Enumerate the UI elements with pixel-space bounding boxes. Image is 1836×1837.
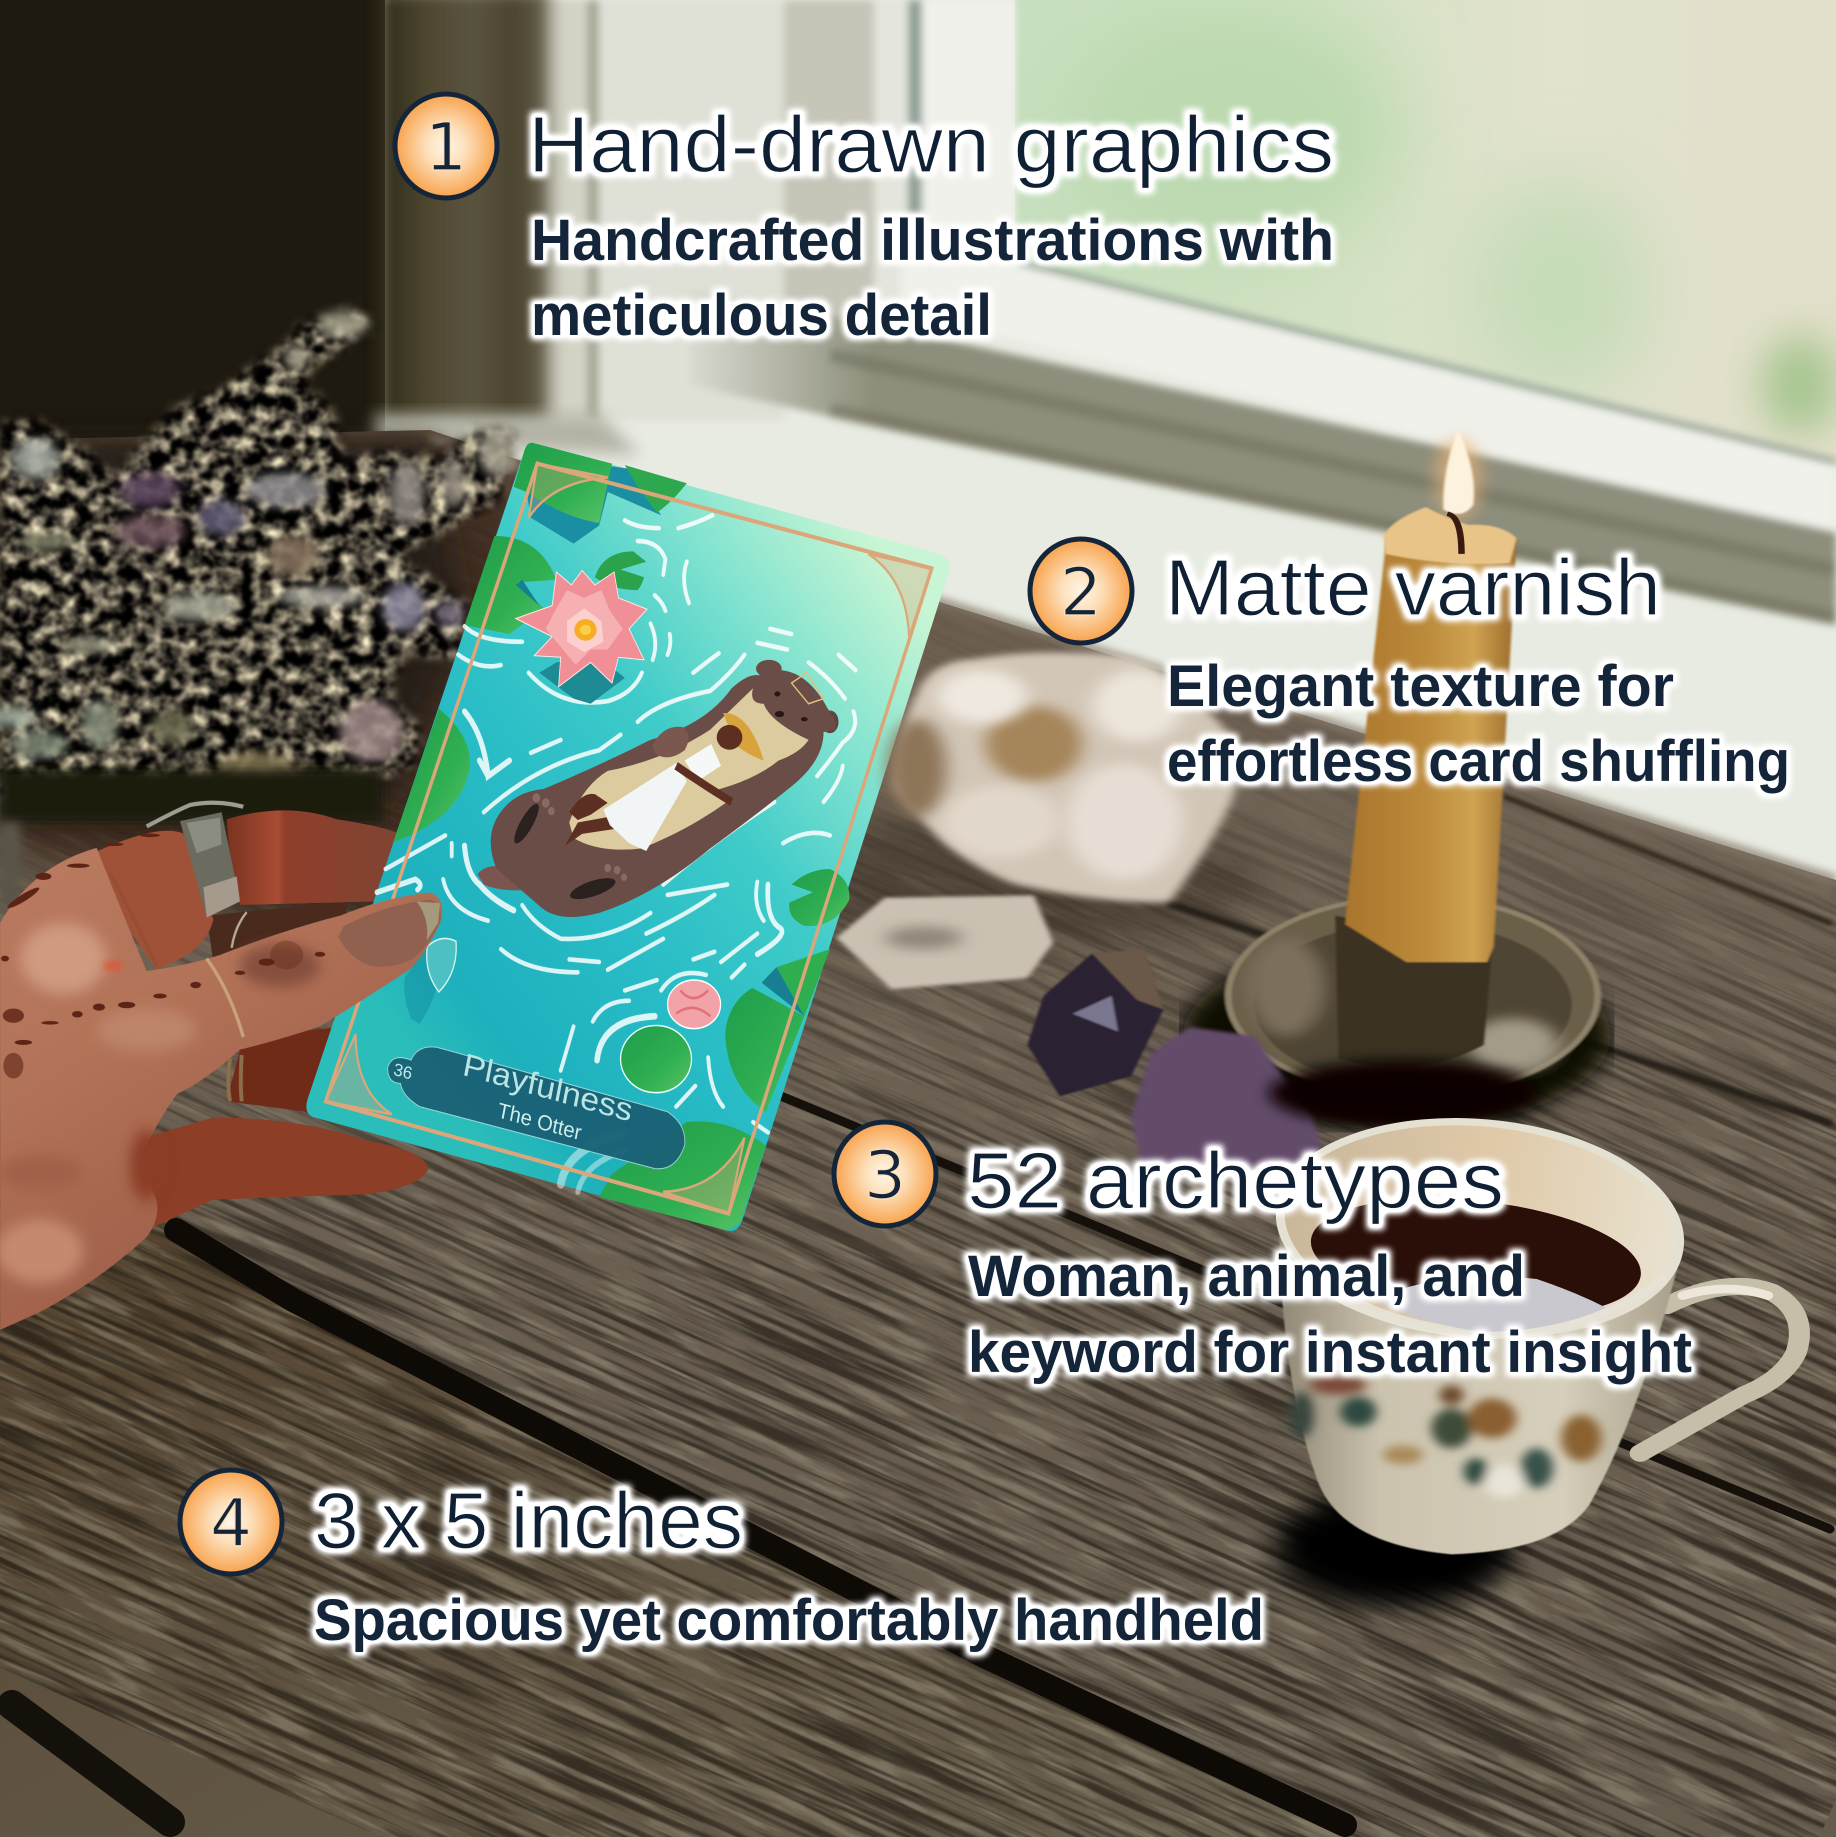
- dark window mullion: [378, 0, 550, 425]
- wooden table: [0, 430, 1836, 1837]
- window frame, lower rail: [690, 240, 1836, 625]
- flame: [1436, 436, 1481, 520]
- thumb nail: [338, 900, 441, 967]
- dark wall: [0, 0, 385, 450]
- card base: [306, 443, 949, 1231]
- cup shadow: [1273, 1488, 1516, 1607]
- woman: [565, 794, 623, 846]
- name banner: [388, 1047, 685, 1169]
- plank gaps: [12, 797, 1830, 1825]
- lotus bud: [668, 980, 721, 1029]
- heading 1: Hand-drawn graphics: [528, 100, 1334, 189]
- wood grain: [0, 793, 1836, 1837]
- water ripples: [377, 515, 856, 1192]
- feature 1: [395, 94, 1334, 348]
- tea: [1302, 1183, 1650, 1332]
- handle: [1640, 1286, 1799, 1453]
- soft table edge: [430, 437, 1836, 880]
- description 3: [968, 1244, 1692, 1385]
- rear fingers behind card: [0, 769, 428, 1230]
- otter belly: [569, 688, 809, 850]
- large quartz: [888, 653, 1238, 902]
- description 3: Woman, animal, and: [968, 1244, 1525, 1309]
- card title: Playfulness: [460, 1047, 635, 1129]
- card number: 36: [392, 1060, 414, 1084]
- thumb and back of hand: [0, 848, 442, 1330]
- description 1: [531, 208, 1334, 348]
- description 3: keyword for instant insight: [968, 1320, 1692, 1385]
- window background: [0, 0, 1836, 1000]
- description 1: meticulous detail: [531, 283, 992, 348]
- gold border: [326, 464, 932, 1214]
- number badge 4: 4: [210, 1485, 252, 1562]
- thin rings: [207, 912, 247, 1101]
- description 2: Elegant texture for: [1167, 654, 1674, 719]
- number badge 1: 1: [425, 109, 467, 186]
- flower highlights: [0, 311, 514, 786]
- knuckle finger: [97, 831, 213, 969]
- otter paws: [510, 800, 543, 847]
- candle: [1345, 429, 1517, 962]
- feature 4: [180, 1470, 1264, 1653]
- number badge 3: [834, 1122, 936, 1226]
- crystals and candle: [836, 429, 1611, 1179]
- heading 3: 52 archetypes: [967, 1136, 1504, 1225]
- heading 4: 3 x 5 inches: [314, 1476, 743, 1565]
- sill: [375, 415, 640, 455]
- dried flowers: [0, 308, 514, 817]
- number badge 1: [395, 94, 497, 198]
- number badge 4: [180, 1470, 282, 1574]
- tarot card: [306, 443, 949, 1231]
- anklet ornament: [427, 938, 456, 992]
- heading 2: Matte varnish: [1165, 543, 1661, 632]
- cup body: [1279, 1229, 1683, 1554]
- otter: [477, 660, 839, 917]
- feature 3: [834, 1122, 1692, 1385]
- lotus flower: [516, 570, 647, 704]
- tea reflection: [1374, 1277, 1614, 1332]
- table shading behind flowers: [0, 430, 518, 915]
- dark amethyst: [1027, 949, 1163, 1096]
- lily pads: [393, 443, 849, 1231]
- cup rim and inside: [1263, 1101, 1697, 1354]
- number badge 3: 3: [864, 1137, 906, 1214]
- feature 2: [1030, 539, 1790, 794]
- hand: [0, 803, 442, 1330]
- silver ring: [147, 803, 243, 917]
- description 2: effortless card shuffling: [1167, 729, 1790, 794]
- description 4: Spacious yet comfortably handheld: [314, 1588, 1264, 1653]
- window glass: [1015, 0, 1836, 467]
- number badge 2: [1030, 539, 1132, 643]
- window frame, vertical: [550, 0, 1015, 420]
- purple amethyst: [1131, 1027, 1332, 1179]
- number badge 2: 2: [1060, 554, 1102, 631]
- description 1: Handcrafted illustrations with: [531, 208, 1334, 273]
- candle holder: [1183, 897, 1611, 1130]
- henna marks: [1, 834, 325, 1079]
- otter face: [774, 691, 808, 721]
- shadow of otter tail: [404, 946, 441, 1024]
- floral pattern: [1289, 1376, 1602, 1498]
- tea cup: [1263, 1060, 1799, 1607]
- dish shadow: [1269, 1060, 1537, 1126]
- description 2: [1167, 654, 1790, 794]
- skin shading: [0, 923, 320, 1284]
- lower left plank: [0, 1112, 876, 1837]
- card subtitle: The Otter: [496, 1099, 584, 1146]
- small quartz: [836, 895, 1053, 989]
- otter arm: [653, 727, 688, 757]
